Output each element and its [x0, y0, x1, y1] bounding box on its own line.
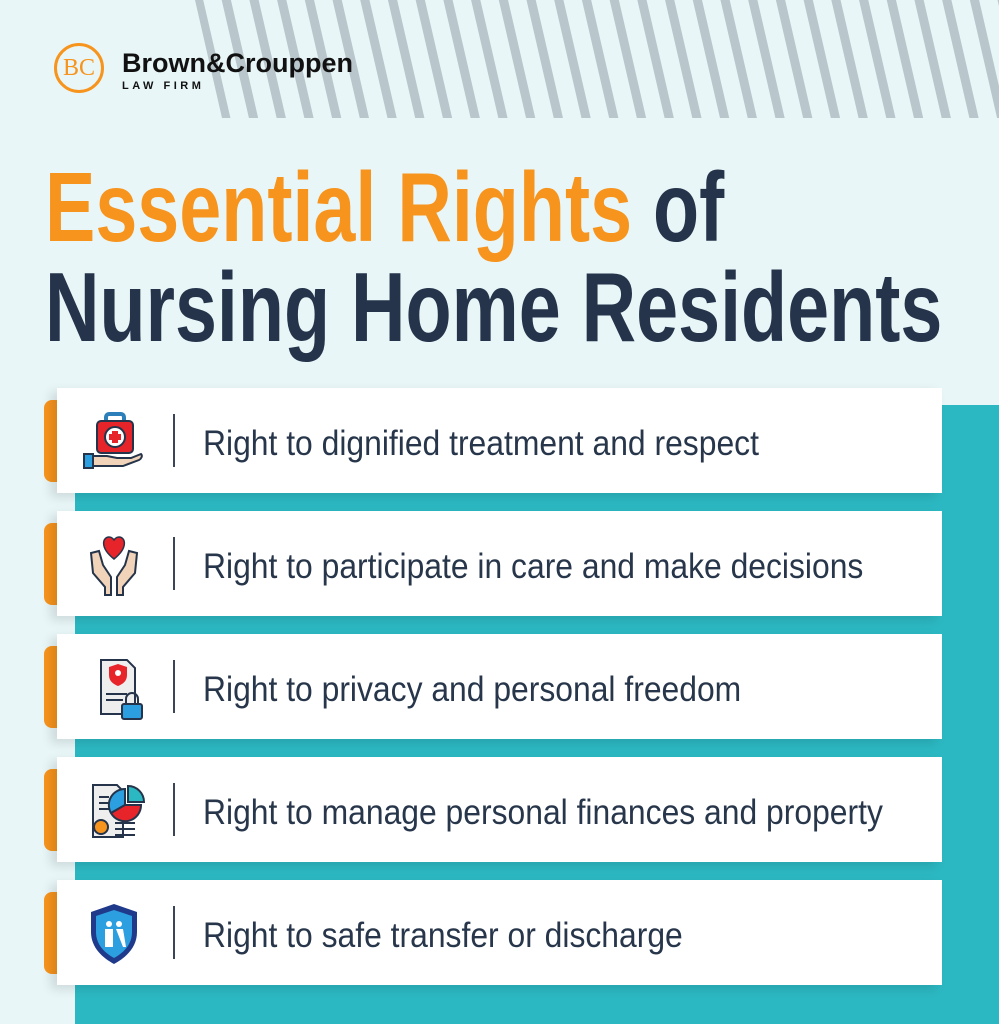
card 4: [57, 757, 942, 862]
stripes decoration: [195, 0, 999, 118]
text: Right to dignified treatment and respect: [203, 424, 759, 463]
text: Right to safe transfer or discharge: [203, 916, 683, 955]
logo subtext: LAW FIRM: [122, 80, 204, 92]
icon: BC circle: BC: [63, 55, 95, 81]
text: Right to participate in care and make decisions: [203, 547, 863, 586]
icon: BC circle: [54, 43, 104, 93]
logo: [54, 43, 353, 93]
title: Nursing Home Residents: [45, 252, 942, 362]
teal background block: [75, 405, 999, 1024]
logo text: Brown&Crouppen: [122, 48, 353, 78]
card 5: [57, 880, 942, 985]
card 2: [57, 511, 942, 616]
icon: finance document with pie chart: [92, 784, 145, 838]
title: [45, 152, 942, 362]
card 3: [57, 634, 942, 739]
text: Right to manage personal finances and property: [203, 793, 883, 832]
icon: medical kit in hand: [83, 412, 143, 469]
title: Essential Rights of: [45, 152, 724, 262]
icon: shield with elderly: [91, 904, 137, 964]
text: Right to privacy and personal freedom: [203, 670, 741, 709]
card 1: [57, 388, 942, 493]
icon: privacy document with lock: [100, 659, 143, 720]
icon: hands with heart: [90, 536, 138, 596]
